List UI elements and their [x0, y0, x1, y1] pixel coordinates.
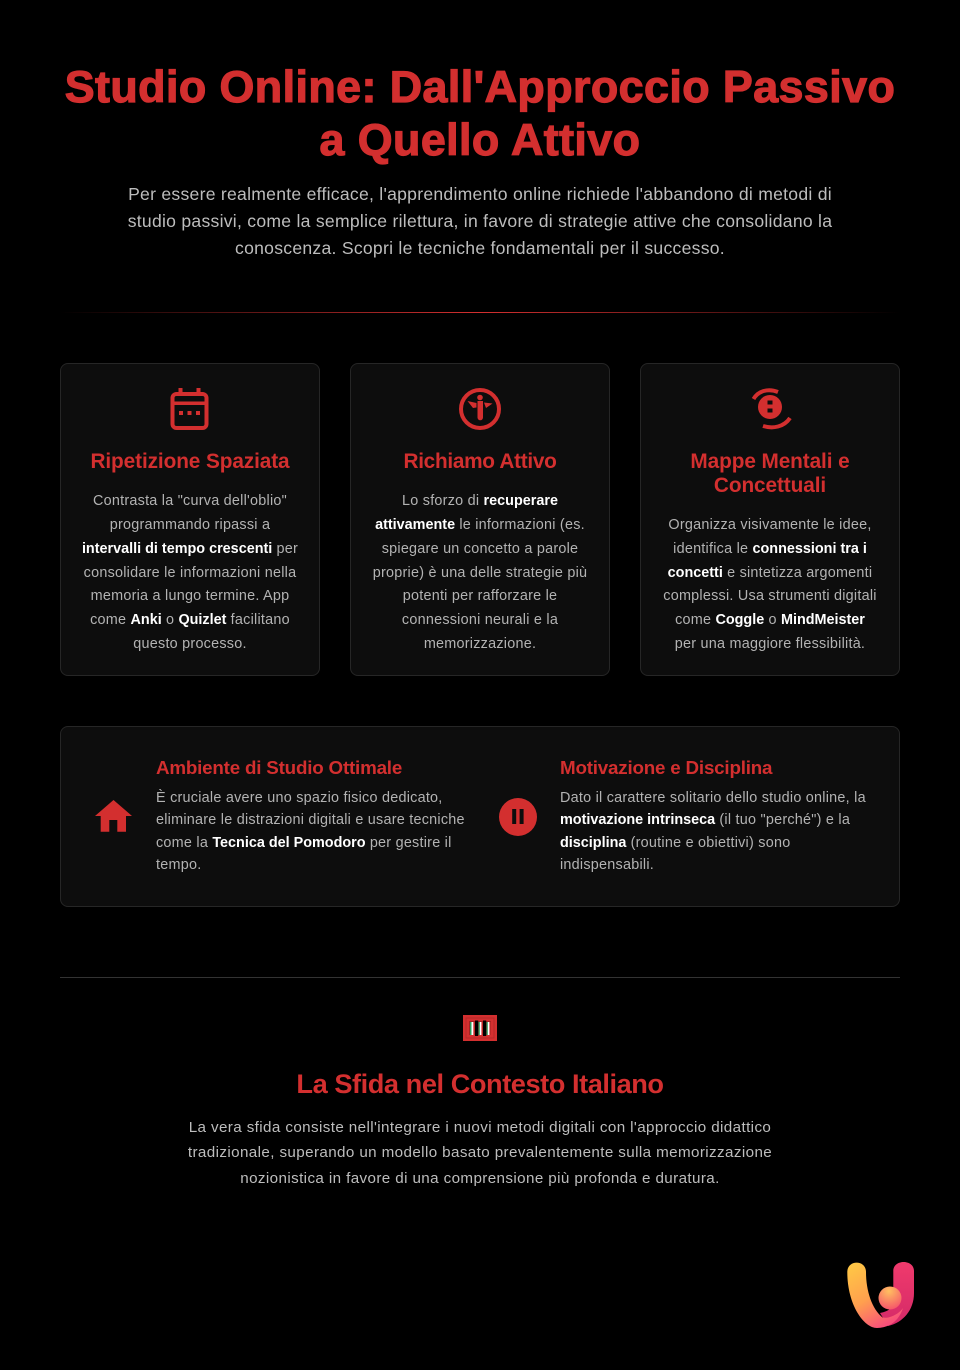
body text: proprie) è una delle strategie più	[373, 565, 587, 581]
heading: Ripetizione Spaziata	[90, 450, 290, 473]
body text: memorizzazione.	[424, 636, 536, 652]
body text: spiegare un concetto a parole	[382, 541, 578, 557]
text: motivazione: disciplina (routine e obiettivi) sono	[560, 835, 790, 851]
right arm	[880, 1262, 914, 1326]
text: La vera sfida consiste nell'integrare i nuovi metodi digitali con l'approccio didattico	[189, 1119, 771, 1136]
heading: motivazione: Motivazione e Disciplina	[560, 757, 772, 778]
body text: concetti e sintetizza argomenti	[668, 565, 872, 581]
title	[65, 62, 895, 165]
icon: pause	[499, 798, 537, 836]
body text	[663, 517, 877, 652]
header	[65, 62, 895, 258]
panel: Richiamo Attivo	[350, 363, 610, 676]
body text: memoria a lungo termine. App	[91, 588, 289, 604]
panel: Mappe Mentali e Concettuali	[640, 363, 900, 676]
heading: La Sfida nel Contesto Italiano	[296, 1068, 664, 1099]
body text: potenti per rafforzare le	[403, 588, 557, 604]
icon: italian flags	[463, 1015, 497, 1041]
icon: rotating circle	[752, 388, 792, 430]
heading: Mappe Mentali e	[690, 450, 850, 473]
body text: questo processo.	[133, 636, 247, 652]
section: sfida italiana	[188, 1015, 772, 1187]
body text: programmando ripassi a	[110, 517, 270, 533]
body text: per una maggiore flessibilità.	[675, 636, 865, 652]
heading: Richiamo Attivo	[403, 450, 557, 473]
logo	[847, 1262, 914, 1328]
body text: come Anki o Quizlet facilitano	[90, 612, 290, 628]
icon: person in circle	[459, 388, 501, 430]
icon: calendar	[170, 388, 208, 430]
body text: attivamente le informazioni (es.	[375, 517, 585, 533]
body text: identifica le connessioni tra i	[673, 541, 867, 557]
left arm	[847, 1263, 903, 1328]
subtitle	[128, 184, 832, 258]
body text	[82, 493, 298, 652]
text: tradizionale, superando un modello basato prevalentemente sulla memorizzazione	[188, 1144, 772, 1161]
ball	[878, 1286, 902, 1310]
text	[188, 1119, 772, 1187]
body text: complessi. Usa strumenti digitali	[663, 588, 877, 604]
text: ambiente: È cruciale avere uno spazio fisico dedicato,	[156, 790, 443, 806]
body text: connessioni neurali e la	[402, 612, 558, 628]
text: ambiente: tempo.	[156, 857, 201, 873]
text: motivazione: indispensabili.	[560, 857, 654, 873]
subtitle: studio passivi, come la semplice rilettura, in favore di strategie attive che consolidano la	[128, 211, 832, 231]
title: a Quello Attivo	[320, 115, 640, 165]
icon: house	[95, 800, 132, 832]
text: motivazione	[560, 790, 866, 873]
heading	[690, 450, 850, 497]
body text: Contrasta la "curva dell'oblio"	[93, 493, 287, 509]
text: ambiente: eliminare le distrazioni digitali e usare tecniche	[156, 812, 465, 828]
subtitle: Per essere realmente efficace, l'apprendimento online richiede l'abbandono di metodi di	[128, 184, 832, 204]
body text: Lo sforzo di recuperare	[402, 493, 558, 509]
heading: Concettuali	[714, 474, 826, 497]
body text: intervalli di tempo crescenti per	[82, 541, 298, 557]
text: ambiente	[156, 789, 465, 873]
heading: ambiente: Ambiente di Studio Ottimale	[156, 757, 402, 778]
body text: consolidare le informazioni nella	[84, 565, 296, 581]
body text: come Coggle o MindMeister	[675, 612, 865, 628]
panel: ambiente e motivazione	[60, 726, 900, 907]
title: Studio Online: Dall'Approccio Passivo	[65, 62, 895, 112]
text: motivazione: Dato il carattere solitario dello studio online, la	[560, 790, 866, 806]
subtitle: conoscenza. Scopri le tecniche fondamentali per il successo.	[235, 238, 725, 258]
body text	[373, 493, 587, 652]
text: ambiente: come la Tecnica del Pomodoro per gestire il	[156, 835, 452, 851]
panel: Ripetizione Spaziata	[60, 363, 320, 676]
text: nozionistica in favore di una comprensione più profonda e duratura.	[240, 1170, 720, 1187]
body text: Organizza visivamente le idee,	[668, 517, 872, 533]
text: motivazione: motivazione intrinseca (il tuo "perché") e la	[560, 812, 850, 828]
